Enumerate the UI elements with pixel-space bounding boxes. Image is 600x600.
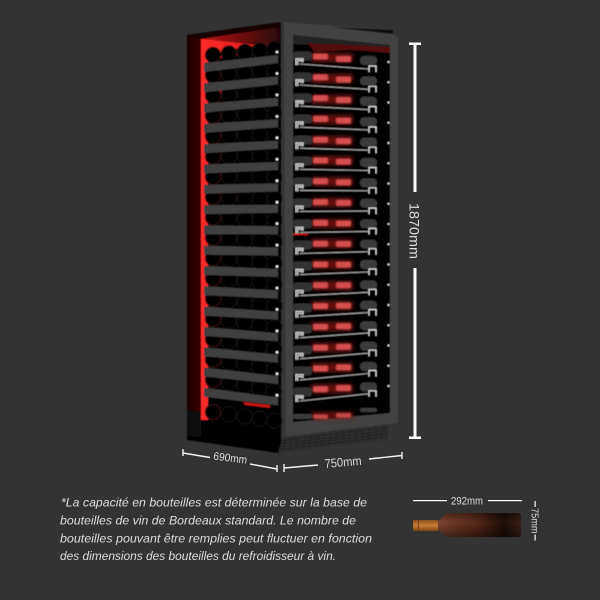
dimension: height 1870mm [406,42,422,439]
rack brackets right [369,66,376,397]
rack brackets left [296,59,303,402]
dimension: bottle length 292mm: 292mm [451,496,483,508]
left bottle bodies [293,52,312,396]
ventilation grille [278,424,388,453]
left shelves [204,55,278,405]
bottle diagram [413,496,540,540]
front frame [281,22,398,437]
footnote text: des dimensions des bouteilles du refroidisseur à vin. [60,549,336,563]
footnote text: bouteilles pouvant être remplies peut fluctuer en fonction [60,532,372,546]
footnote text: bouteilles de vin de Bordeaux standard. Le nombre de [60,514,356,528]
cabinet interior with red light [201,27,280,432]
footnote text [60,496,372,563]
wine cabinet [187,22,398,453]
front bottle rows [293,52,390,419]
dimension: depth 690mm [183,449,277,472]
dimension: bottle diameter 75mm: 75mm [528,508,540,534]
red reflection [293,234,308,235]
dimension: depth 690mm: 690mm [213,451,248,467]
dimension: width 750mm [284,452,402,472]
red bottle labels left column [313,54,328,419]
red bottle labels right column [336,56,351,418]
rack pegs [388,61,390,387]
rack rails [300,64,368,401]
right bottle bodies [293,56,377,419]
dimension: width 750mm: 750mm [324,454,362,471]
cabinet left side exterior [187,22,281,453]
bottle row glow [311,53,353,419]
dimension: height 1870mm: 1870mm [406,203,422,259]
left shelf pegs [276,51,278,397]
left bottle rows [204,41,283,429]
footnote text: *La capacité en bouteilles est déterminée sur la base de [61,496,367,510]
icon: bottle [413,513,521,537]
